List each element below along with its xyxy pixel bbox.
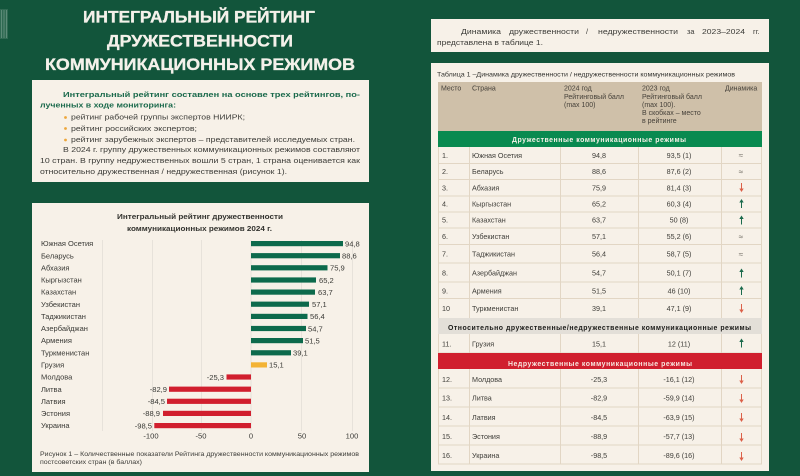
relative row bbox=[442, 340, 690, 348]
unfriendly bars bbox=[154, 374, 251, 428]
intro lead sentence: лученных в ходе мониторинга: bbox=[40, 100, 176, 110]
friendly rows: 60,3 (4) bbox=[667, 200, 691, 208]
bullet list bbox=[64, 114, 355, 144]
friendly rows: 7. bbox=[442, 250, 448, 259]
table intro text: Динамика bbox=[461, 27, 502, 36]
friendly rows: Беларусь bbox=[472, 167, 504, 176]
friendly rows: 6. bbox=[442, 232, 448, 241]
value labels: -98,5 bbox=[135, 421, 152, 430]
bullet list: рейтинг российских экспертов; bbox=[71, 125, 197, 133]
table header: 2023 год bbox=[642, 86, 670, 92]
section header: relative: Относительно дружественные/недружественные коммуникационные режимы bbox=[448, 325, 751, 332]
icons: up arrows bbox=[739, 199, 744, 348]
unfriendly rows: -98,5 bbox=[591, 451, 607, 460]
country labels: Казахстан bbox=[41, 288, 76, 297]
panel: bar chart bbox=[32, 203, 369, 472]
intro lead sentence bbox=[40, 90, 361, 110]
friendly rows: 50,1 (7) bbox=[667, 269, 691, 278]
table intro text bbox=[437, 27, 760, 47]
value labels: -25,3 bbox=[207, 373, 224, 382]
friendly rows: 46 (10) bbox=[668, 286, 690, 296]
title bbox=[45, 8, 355, 74]
unfriendly rows: -25,3 bbox=[591, 375, 607, 384]
unfriendly rows: 15. bbox=[442, 432, 452, 441]
value labels: 75,9 bbox=[330, 264, 345, 273]
friendly rows: 4. bbox=[442, 200, 448, 208]
friendly rows: Азербайджан bbox=[472, 269, 517, 278]
value labels: 39,1 bbox=[293, 349, 308, 358]
friendly rows: 55,2 (6) bbox=[667, 232, 691, 241]
relative row: Грузия bbox=[472, 340, 494, 348]
table intro text: недружественности bbox=[598, 27, 678, 36]
table header: Место bbox=[441, 86, 461, 92]
country labels: Таджикистан bbox=[41, 312, 86, 321]
section header: unfriendly bbox=[438, 353, 762, 369]
friendly bars bbox=[251, 241, 343, 355]
country labels: Латвия bbox=[41, 397, 66, 406]
unfriendly rows bbox=[442, 375, 695, 460]
friendly rows: 87,6 (2) bbox=[667, 167, 691, 176]
axis tick labels: -100 bbox=[143, 432, 159, 440]
table intro text: гг. bbox=[753, 27, 760, 36]
friendly rows: 54,7 bbox=[592, 269, 606, 278]
figure caption: постсоветских стран (в баллах) bbox=[40, 459, 142, 466]
friendly rows: 94,8 bbox=[592, 151, 606, 160]
relative row: 12 (11) bbox=[668, 340, 690, 348]
value labels: 56,4 bbox=[310, 312, 325, 321]
unfriendly rows: 13. bbox=[442, 394, 452, 403]
logo fragment bbox=[0, 9, 8, 39]
friendly rows: 2. bbox=[442, 167, 448, 176]
unfriendly rows: 14. bbox=[442, 413, 452, 422]
unfriendly rows: -16,1 (12) bbox=[663, 375, 695, 384]
country labels: Кыргызстан bbox=[41, 276, 82, 285]
panel: table intro bbox=[431, 19, 769, 52]
unfriendly rows: -63,9 (15) bbox=[663, 413, 695, 422]
value labels: 15,1 bbox=[269, 361, 284, 370]
country labels: Туркменистан bbox=[41, 348, 89, 357]
axis tick labels: 50 bbox=[298, 432, 306, 440]
table intro text: дружественности bbox=[509, 27, 579, 36]
intro body paragraph bbox=[40, 146, 361, 176]
friendly rows: 8. bbox=[442, 269, 448, 278]
unfriendly rows: -57,7 (13) bbox=[663, 432, 695, 441]
chart title: коммуникационных режимов 2024 г. bbox=[127, 224, 272, 233]
friendly rows: 81,4 (3) bbox=[667, 183, 691, 192]
title: ИНТЕГРАЛЬНЫЙ РЕЙТИНГ bbox=[83, 8, 315, 27]
panel: table bbox=[431, 63, 769, 471]
country labels: Абхазия bbox=[41, 263, 70, 272]
country labels: Эстония bbox=[41, 409, 70, 418]
unfriendly rows: -89,6 (16) bbox=[663, 451, 695, 460]
table header: Рейтинговый балл bbox=[564, 93, 624, 101]
country labels: Азербайджан bbox=[41, 324, 88, 333]
friendly rows: 5. bbox=[442, 216, 448, 225]
table header: Динамика bbox=[725, 86, 757, 92]
unfriendly rows: -59,9 (14) bbox=[663, 394, 695, 403]
country labels: Грузия bbox=[41, 360, 64, 370]
section header: friendly: Дружественные коммуникационные режимы bbox=[512, 137, 686, 144]
table header: Страна bbox=[472, 86, 496, 92]
table header: 2024 год bbox=[564, 86, 592, 92]
value labels: 51,5 bbox=[305, 336, 320, 345]
friendly rows bbox=[442, 151, 691, 313]
table intro text: 2023–2024 bbox=[702, 27, 745, 36]
icons: down arrows bbox=[739, 183, 744, 461]
friendly rows: 93,5 (1) bbox=[667, 151, 691, 160]
unfriendly rows: -88,9 bbox=[591, 432, 607, 441]
friendly rows: 63,7 bbox=[592, 216, 606, 225]
axis tick labels: -50 bbox=[196, 432, 206, 440]
chart title: Интегральный рейтинг дружественности bbox=[117, 212, 283, 221]
table header: Рейтинговый балл bbox=[642, 93, 702, 101]
country labels: Армения bbox=[41, 336, 72, 345]
icons: no change: ≈ bbox=[739, 232, 744, 242]
unfriendly rows: Литва bbox=[472, 394, 492, 403]
icons: no change: ≈ bbox=[739, 151, 744, 160]
value labels: 88,6 bbox=[342, 252, 357, 260]
unfriendly rows: 16. bbox=[442, 451, 452, 460]
unfriendly rows: Молдова bbox=[472, 375, 502, 384]
friendly rows: 56,4 bbox=[592, 250, 606, 259]
section header: relative bbox=[438, 318, 762, 334]
friendly rows: 57,1 bbox=[592, 232, 606, 241]
table intro text: за bbox=[687, 27, 695, 36]
unfriendly rows: 12. bbox=[442, 375, 452, 384]
friendly rows: Армения bbox=[472, 286, 502, 296]
section header: friendly bbox=[438, 131, 762, 147]
friendly rows: Казахстан bbox=[472, 216, 506, 225]
friendly rows: Таджикистан bbox=[472, 250, 515, 259]
section header: unfriendly: Недружественные коммуникационные режимы bbox=[508, 361, 692, 368]
table intro text: / bbox=[586, 27, 589, 36]
friendly rows: Южная Осетия bbox=[472, 151, 522, 160]
axis tick labels bbox=[143, 432, 358, 440]
country labels: Молдова bbox=[41, 373, 73, 382]
relative row: 11. bbox=[442, 340, 451, 348]
intro body paragraph: 10 стран. В группу недружественных вошли 5 стран, 1 страна оценивается как bbox=[40, 157, 361, 165]
icons: no change: ≈ bbox=[739, 250, 744, 259]
relative row: 15,1 bbox=[592, 340, 606, 348]
friendly rows: 75,9 bbox=[592, 183, 606, 192]
unfriendly rows: Латвия bbox=[472, 413, 496, 422]
value labels: 54,7 bbox=[308, 324, 323, 333]
value labels: 65,2 bbox=[319, 276, 334, 285]
table header: в рейтинге bbox=[642, 117, 677, 125]
country labels: Южная Осетия bbox=[41, 239, 93, 248]
intro body paragraph: В 2024 г. группу дружественных коммуникационных режимов составляют bbox=[63, 146, 361, 154]
value labels: 63,7 bbox=[318, 288, 333, 297]
friendly rows: 10 bbox=[442, 304, 450, 313]
friendly rows: 51,5 bbox=[592, 286, 606, 296]
title: КОММУНИКАЦИОННЫХ РЕЖИМОВ bbox=[45, 55, 355, 74]
table intro text: представлена в таблице 1. bbox=[437, 38, 543, 47]
friendly rows: 9. bbox=[442, 286, 448, 296]
intro body paragraph: относительно дружественная / недружественная (рисунок 1). bbox=[40, 168, 287, 176]
icons: no change bbox=[739, 151, 744, 259]
country labels: Узбекистан bbox=[41, 300, 80, 309]
friendly rows: 58,7 (5) bbox=[667, 250, 691, 259]
unfriendly rows: Украина bbox=[472, 451, 499, 460]
friendly rows: Кыргызстан bbox=[472, 200, 511, 208]
table header: В скобках – место bbox=[642, 109, 701, 117]
friendly rows: Узбекистан bbox=[472, 232, 509, 241]
value labels bbox=[135, 239, 360, 430]
unfriendly rows: -84,5 bbox=[591, 413, 607, 422]
bullet list: рейтинг рабочей группы экспертов НИИРК; bbox=[71, 114, 245, 122]
axis tick labels: 0 bbox=[249, 432, 253, 440]
table caption: Таблица 1 –Динамика дружественности / недружественности коммуникационных режимов bbox=[437, 71, 736, 79]
intro lead sentence: Интегральный рейтинг составлен на основе трех рейтингов, по- bbox=[63, 90, 361, 99]
friendly rows: 3. bbox=[442, 183, 448, 192]
figure caption: Рисунок 1 – Количественные показатели Рейтинга дружественности коммуникационных режимов bbox=[40, 451, 359, 458]
table header bbox=[438, 82, 762, 131]
table header: (max 100). bbox=[642, 102, 676, 109]
friendly rows: 39,1 bbox=[592, 304, 606, 313]
country labels: Литва bbox=[41, 385, 62, 394]
title: ДРУЖЕСТВЕННОСТИ bbox=[107, 31, 293, 50]
friendly rows: 47,1 (9) bbox=[667, 304, 691, 313]
axis tick labels: 100 bbox=[346, 432, 358, 440]
value labels: 57,1 bbox=[312, 300, 327, 309]
friendly rows: 1. bbox=[442, 151, 448, 160]
panel: intro text bbox=[32, 80, 369, 182]
friendly rows: 50 (8) bbox=[670, 216, 688, 225]
unfriendly rows: Эстония bbox=[472, 432, 500, 441]
friendly rows: 65,2 bbox=[592, 200, 606, 208]
unfriendly rows: -82,9 bbox=[591, 394, 607, 403]
bullet list: рейтинг зарубежных экспертов – представителей исследуемых стран. bbox=[71, 136, 355, 144]
country labels: Украина bbox=[41, 421, 70, 430]
table header: (max 100) bbox=[564, 102, 596, 109]
value labels: -88,9 bbox=[143, 409, 160, 418]
value labels: 94,8 bbox=[345, 239, 360, 248]
chart title bbox=[117, 212, 283, 233]
icons: no change: ≈ bbox=[739, 168, 744, 176]
country labels bbox=[41, 239, 93, 430]
country labels: Беларусь bbox=[41, 251, 74, 260]
neutral bar bbox=[251, 362, 267, 368]
friendly rows: 88,6 bbox=[592, 167, 606, 176]
value labels: -82,9 bbox=[150, 385, 167, 394]
friendly rows: Абхазия bbox=[472, 183, 499, 192]
figure caption bbox=[40, 451, 359, 466]
value labels: -84,5 bbox=[148, 397, 165, 406]
friendly rows: Туркменистан bbox=[472, 304, 518, 313]
